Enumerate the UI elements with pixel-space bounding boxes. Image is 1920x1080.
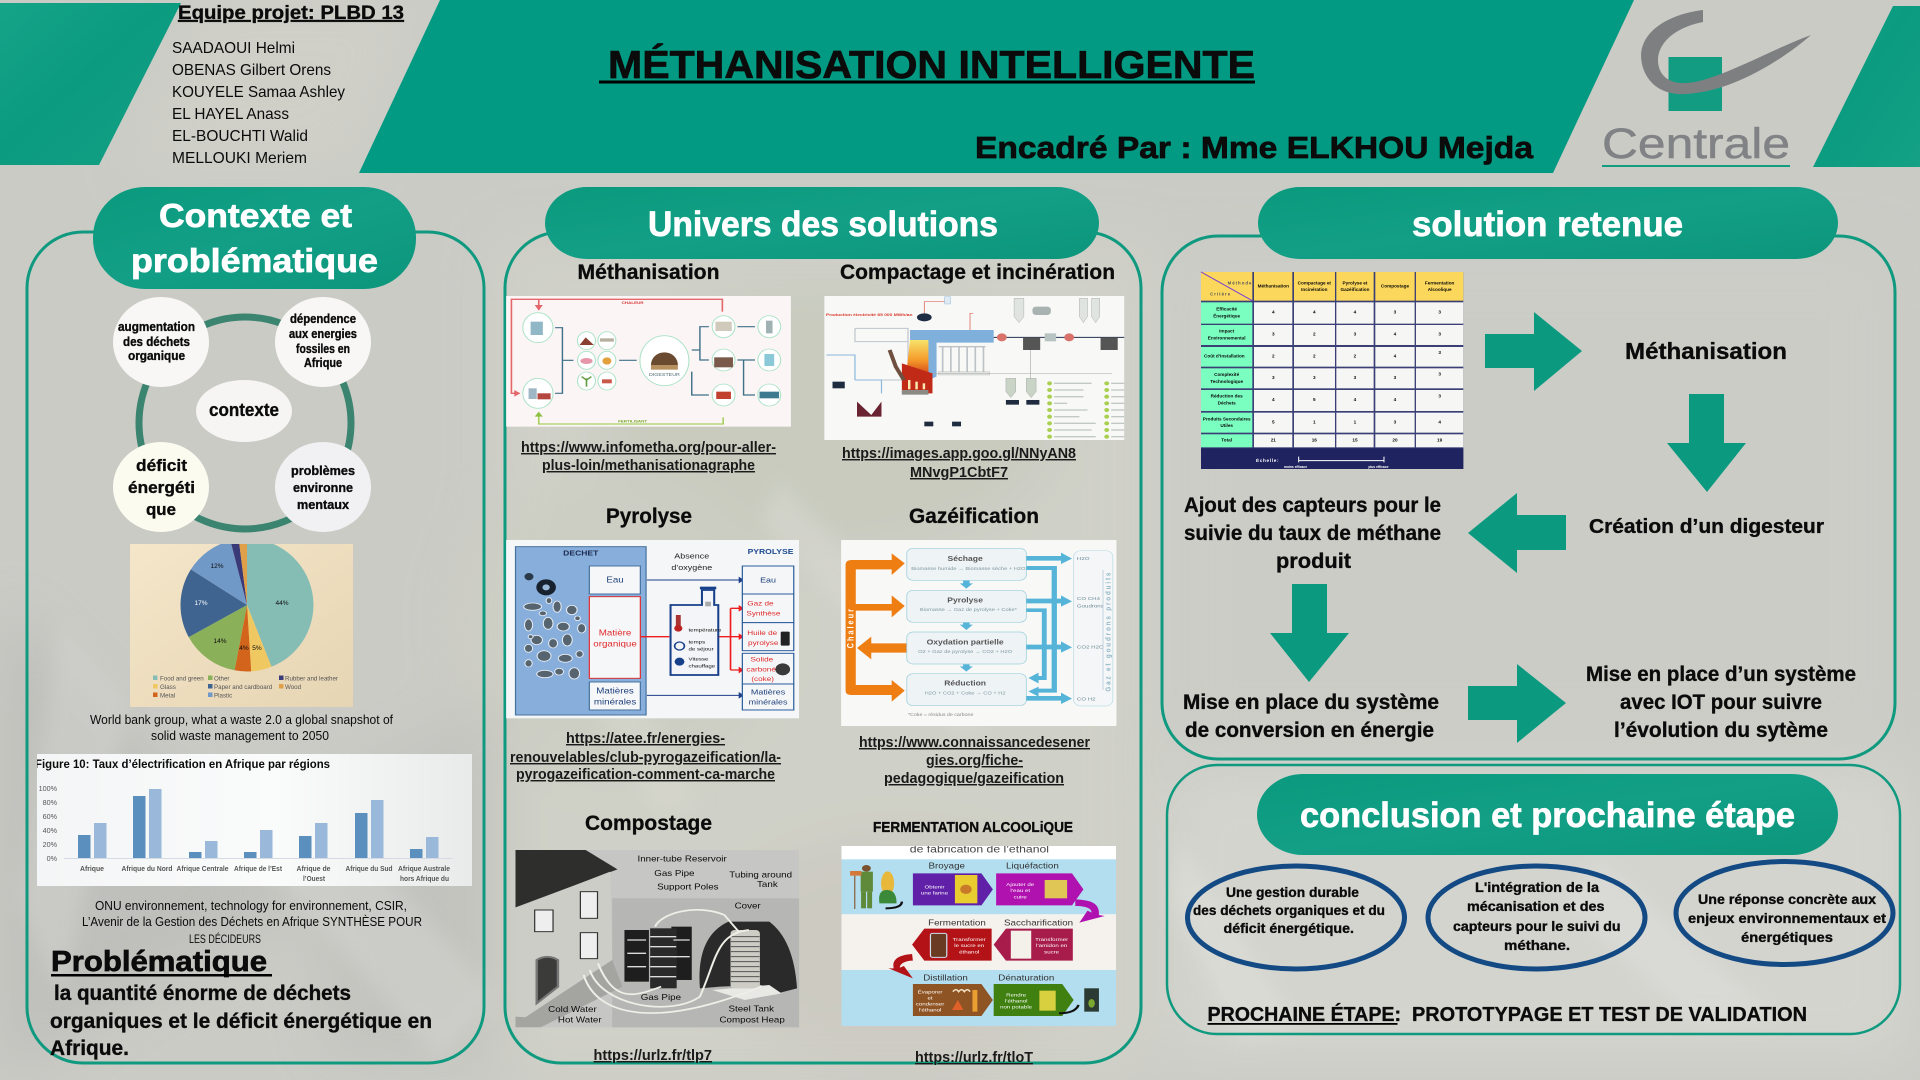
comparison table: Compostage [1381, 284, 1409, 289]
context cycle diagram: problèmes [291, 463, 355, 478]
diagram: methanisation process: DIGESTEUR [649, 372, 680, 378]
context cycle diagram: augmentation [118, 320, 195, 334]
oval: integration: méthane. [1504, 937, 1570, 953]
comparison table: plus efficace [1368, 465, 1389, 469]
bar chart: electrification in Africa: 0% [47, 854, 58, 863]
diagram: compost heap: Cover [735, 901, 761, 910]
comparison table: Coût d’Installation [1204, 354, 1245, 359]
comparison table: 3 [1394, 419, 1397, 424]
comparison table: 3 [1272, 375, 1275, 380]
oval: integration: mécanisation et des [1467, 898, 1605, 914]
comparison table: 3 [1438, 350, 1441, 355]
link: pyrolysis source [510, 731, 781, 783]
text: energy conversion [1183, 691, 1439, 742]
problem statement: organiques et le déficit énergétique en [50, 1010, 432, 1033]
comparison table: 20 [1392, 438, 1398, 443]
bar chart: electrification in Africa: Afrique du Nord [122, 864, 173, 873]
comparison table: 4 [1272, 310, 1275, 315]
pie chart: waste composition: Paper and cardboard [214, 684, 273, 691]
comparison table: Efficacité [1216, 307, 1237, 312]
link: methanisation source [521, 440, 776, 474]
diagram: ethanol production: Saccharification [1004, 918, 1073, 927]
comparison table: Méthanisation [1258, 284, 1289, 289]
text: energy conversion: Mise en place du système [1183, 691, 1439, 714]
caption: ONU source: LES DÉCIDEURS [189, 933, 261, 946]
caption: ONU source: ONU environnement, technology for environnement, CSIR, [95, 899, 407, 913]
diagram: pyrolysis: organique [593, 639, 637, 648]
text: energy conversion: de conversion en énergie [1185, 719, 1434, 742]
comparison table: 4 [1313, 310, 1316, 315]
context cycle diagram: fossiles en [296, 342, 350, 356]
diagram: pyrolysis: d’oxygène [671, 564, 713, 572]
diagram: compost heap: Tank [757, 880, 778, 889]
diagram: gasification: Gaz et goudrons produits [1105, 571, 1113, 692]
diagram: gasification [841, 540, 1116, 726]
text: sensors: suivie du taux de méthane [1184, 522, 1441, 545]
pie chart: waste composition: Metal [160, 692, 175, 700]
context cycle diagram: énergéti [128, 478, 195, 497]
diagram: ethanol production: sucre [1044, 950, 1059, 955]
comparison table: Pyrolyse et [1343, 280, 1368, 285]
team members: EL-BOUCHTI Walid [172, 128, 308, 145]
diagram: incineration plant [824, 296, 1124, 440]
next step [1208, 1003, 1807, 1026]
comparison table: 2 [1313, 332, 1316, 337]
arrow: methanisation to digester [1667, 394, 1746, 492]
comparison table: 3 [1438, 372, 1441, 377]
caption: ONU source [82, 899, 422, 946]
oval: sustainable management: Une gestion durable [1226, 884, 1359, 900]
comparison table: Compactage et [1298, 280, 1331, 285]
diagram: ethanol production: cuire [1014, 895, 1027, 900]
diagram: methanisation process: CHALEUR [622, 300, 644, 305]
comparison table: 1 [1354, 419, 1357, 424]
diagram: gasification: H2O [1077, 556, 1090, 562]
bar chart: electrification in Africa: 40% [43, 826, 58, 835]
diagram: pyrolysis: Solide [751, 655, 773, 663]
comparison table: Environnemental [1208, 336, 1246, 341]
comparison table: 3 [1438, 332, 1441, 337]
heading: conclusion: conclusion et prochaine étape [1300, 796, 1795, 835]
comparison table: Réduction des [1211, 394, 1243, 399]
bar chart: electrification in Africa: hors Afrique du [400, 874, 449, 883]
comparison table: 15 [1352, 438, 1358, 443]
panel: univers des solutions [505, 187, 1141, 1066]
context cycle diagram: déficit [136, 456, 187, 475]
header: main teal banner [359, 0, 1634, 173]
subheading: compactage: Compactage et incinération [840, 261, 1115, 284]
comparison table: Échelle: [1256, 456, 1279, 463]
link: pyrolysis source: renouvelables/club-pyrogazeification/la- [510, 750, 781, 766]
link: gasification source [859, 735, 1090, 787]
heading: contexte: problématique [131, 242, 378, 279]
text: IOT system: Mise en place d’un système [1586, 663, 1856, 686]
arrow: table to methanisation [1485, 312, 1582, 391]
diagram: pyrolysis: PYROLYSE [748, 548, 793, 556]
comparison table: Méthode [1228, 281, 1252, 286]
link: compost source: https://urlz.fr/tlp7 [594, 1048, 712, 1064]
bar chart: electrification in Africa: Afrique [80, 864, 104, 873]
team members [172, 40, 345, 167]
link: methanisation source: plus-loin/methanisationagraphe [542, 458, 755, 474]
diagram: compost heap: Hot Water [558, 1015, 602, 1024]
link: ethanol source: https://urlz.fr/tloT [915, 1050, 1033, 1066]
comparison table: Utiles [1220, 423, 1233, 428]
panel: contexte et problematique [27, 187, 484, 1063]
next step: PROTOTYPAGE ET TEST DE VALIDATION [1412, 1004, 1807, 1026]
bar chart: electrification in Africa: Afrique de l’Est [234, 864, 282, 873]
pie chart: waste composition: Rubber and leather [285, 676, 338, 682]
diagram: pyrolysis: Synthèse [746, 609, 780, 617]
bar chart: electrification in Africa: Afrique Centrale [176, 864, 228, 873]
bar chart: electrification in Africa: Afrique du Sud [346, 864, 393, 873]
diagram: gasification: Biomasse → Gaz de pyrolyse + Coke* [920, 607, 1017, 613]
oval: sustainable management: des déchets organiques et du [1193, 902, 1385, 918]
link: gasification source: https://www.connaissancedesener [859, 735, 1090, 751]
subheading: compostage: Compostage [585, 812, 712, 835]
link: incineration source: https://images.app.goo.gl/NNyAN8 [842, 446, 1076, 462]
subheading: gazeification: Gazéification [909, 505, 1039, 528]
comparison table: 4 [1394, 397, 1397, 402]
problem statement [50, 982, 432, 1060]
diagram: ethanol production: non potable [1000, 1005, 1032, 1010]
problem statement: la quantité énorme de déchets [54, 982, 351, 1005]
link: gasification source: gies.org/fiche- [926, 753, 1023, 769]
oval: sustainable management [1188, 866, 1404, 969]
diagram: pyrolysis: Gaz de [747, 599, 774, 607]
diagram: pyrolysis: de séjour [688, 647, 714, 652]
comparison table: 2 [1272, 353, 1275, 358]
heading: conclusion [1257, 774, 1838, 855]
comparison table: 4 [1354, 310, 1357, 315]
header: left teal shape [0, 3, 181, 165]
context cycle diagram: dépendence [290, 312, 356, 326]
context cycle diagram [113, 297, 371, 532]
diagram: ethanol production: Distillation [923, 973, 968, 982]
pie chart: waste composition: Wood [285, 684, 302, 691]
heading: solution retenue: solution retenue [1412, 205, 1683, 244]
comparison table: Technologique [1210, 379, 1243, 384]
oval: integration: capteurs pour le suivi du [1453, 918, 1620, 934]
diagram: pyrolysis: Matières [751, 688, 785, 696]
pie chart: waste composition: Other [214, 676, 229, 682]
comparison table: 19 [1437, 438, 1443, 443]
bar chart: electrification in Africa: Afrique de [296, 864, 330, 873]
link: pyrolysis source: https://atee.fr/energies- [566, 731, 725, 747]
comparison table: Fermentation [1425, 280, 1455, 285]
diagram: pyrolysis: Matières [596, 686, 634, 695]
pie chart: waste composition: 4% [239, 645, 249, 652]
comparison table: 4 [1394, 353, 1397, 358]
context cycle diagram: aux energies [289, 327, 357, 341]
arrow: sensors to conversion [1270, 584, 1349, 682]
pie chart: waste composition: Glass [160, 684, 176, 691]
comparison table: Produits Secondaires [1203, 416, 1251, 421]
diagram: incineration plant: Production électricité 65 000 MWh/an [826, 312, 913, 317]
heading: univers des solutions: Univers des solutions [648, 205, 998, 244]
text: methanisation: Méthanisation [1625, 338, 1787, 364]
comparison table: 3 [1438, 394, 1441, 399]
diagram: ethanol production: l’éthanol [919, 1008, 941, 1013]
text: IOT system: l’évolution du sytème [1614, 719, 1828, 742]
diagram: gasification: *Coke = résidus de carbone [908, 712, 974, 718]
oval: concrete response: énergétiques [1741, 929, 1833, 945]
diagram: pyrolysis: minérales [594, 697, 637, 706]
text: IOT system: avec IOT pour suivre [1620, 691, 1822, 714]
caption: world bank source [90, 713, 393, 743]
comparison table: 16 [1312, 438, 1317, 443]
link: pyrolysis source: pyrogazeification-comment-ca-marche [516, 767, 775, 783]
diagram: compost heap: Gas Pipe [641, 993, 681, 1002]
diagram: pyrolysis: Huile de [747, 629, 777, 637]
comparison table: Total [1221, 438, 1232, 443]
diagram: pyrolysis: température [688, 628, 721, 633]
heading: solution retenue [1258, 187, 1838, 259]
diagram: pyrolysis: pyrolyse [748, 639, 778, 647]
diagram: ethanol production: et [927, 996, 933, 1001]
heading: univers des solutions [545, 187, 1099, 259]
diagram: compost heap: Cold Water [548, 1005, 597, 1014]
comparison table: 5 [1313, 397, 1316, 402]
context cycle diagram: organique [128, 349, 185, 363]
diagram: ethanol production: Transformer [1035, 937, 1068, 943]
context cycle diagram: mentaux [297, 497, 350, 512]
diagram: gasification: Goudrons [1077, 604, 1104, 609]
oval: integration: L'intégration de la [1475, 879, 1599, 895]
diagram: ethanol production: Fermentation [928, 918, 986, 927]
comparison table [1201, 272, 1463, 469]
bar chart: electrification in Africa: 100% [39, 784, 58, 793]
diagram: ethanol production: une farine [921, 891, 948, 896]
bar chart: electrification in Africa: Afrique Australe [398, 864, 450, 873]
heading: contexte: Contexte et [159, 197, 352, 234]
comparison table: Déchets [1218, 401, 1236, 406]
diagram: ethanol production [841, 845, 1116, 1026]
logo: Centrale [1602, 10, 1811, 168]
team members: OBENAS Gilbert Orens [172, 62, 331, 79]
diagram: gasification: CO H2 [1077, 697, 1096, 702]
diagram: ethanol production: Transformer [953, 937, 986, 943]
comparison table: 3 [1354, 332, 1357, 337]
comparison table: Gazéification [1340, 287, 1370, 292]
diagram: pyrolysis: temps [688, 640, 705, 645]
caption: world bank source: World bank group, what a waste 2.0 a global snapshot of [90, 713, 393, 727]
pie chart: waste composition: Food and green [160, 676, 204, 682]
comparison table: moins efficace [1284, 465, 1307, 469]
pie chart: waste composition: 5% [252, 645, 262, 652]
comparison table: Impact [1219, 329, 1235, 334]
bar chart: electrification in Africa [35, 754, 472, 886]
comparison table: 21 [1271, 438, 1276, 443]
heading: contexte [93, 187, 416, 289]
pie chart: waste composition: 14% [213, 638, 227, 645]
pie chart: waste composition: 17% [194, 600, 208, 607]
diagram: pyrolysis: Eau [606, 576, 624, 584]
diagram: compost heap: Compost Heap [720, 1015, 785, 1024]
diagram: pyrolysis: Eau [760, 576, 777, 584]
diagram: pyrolysis: Absence [674, 552, 710, 560]
pie chart: waste composition [130, 538, 353, 707]
diagram: gasification: Séchage [948, 555, 983, 563]
link: incineration source: MNvgP1CbtF7 [910, 465, 1008, 481]
bar chart: electrification in Africa: Figure 10: Taux d’électrification en Afrique par régions [35, 759, 330, 771]
bar chart: electrification in Africa: 80% [43, 798, 58, 807]
diagram: methanisation process: FERTILISANT [618, 419, 648, 424]
team heading: Equipe projet: PLBD 13 [178, 3, 404, 24]
caption: world bank source: solid waste management to 2050 [151, 729, 329, 743]
team members: MELLOUKI Meriem [172, 150, 307, 167]
diagram: pyrolysis [506, 540, 799, 718]
diagram: ethanol production: Ajouter de [1006, 882, 1034, 888]
supervisor: Encadré Par : Mme ELKHOU Mejda [975, 130, 1534, 165]
problem statement: Afrique. [50, 1037, 129, 1060]
subheading: methanisation: Méthanisation [578, 261, 720, 284]
diagram: gasification: H2O + CO2 + Coke → CO + H2 [925, 691, 1006, 696]
text: sensors [1184, 494, 1441, 573]
arrow: digester to sensors [1468, 493, 1566, 573]
link: incineration source [842, 446, 1076, 481]
pie chart: waste composition: 12% [210, 563, 224, 570]
comparison table: 3 [1394, 375, 1397, 380]
diagram: compost heap [516, 850, 799, 1027]
team members: SAADAOUI Helmi [172, 40, 295, 57]
comparison table: Critère [1210, 292, 1231, 297]
diagram: ethanol production: Évaporer [918, 989, 943, 995]
header: right teal shape [1813, 6, 1920, 167]
oval: concrete response: Une réponse concrète aux [1698, 891, 1876, 907]
diagram: ethanol production: l’eau et [1010, 888, 1031, 894]
comparison table: 4 [1354, 397, 1357, 402]
diagram: compost heap: Gas Pipe [654, 869, 695, 878]
diagram: ethanol production: Obtenir [925, 885, 945, 890]
comparison table: 2 [1313, 353, 1316, 358]
diagram: pyrolysis: chauffage [688, 664, 715, 669]
comparison table: Alcoolique [1428, 287, 1452, 292]
diagram: gasification: O2 + Gaz de pyrolyse → CO2 + H2O [918, 649, 1012, 655]
diagram: compost heap: Steel Tank [728, 1004, 775, 1013]
comparison table: Énergétique [1213, 312, 1241, 319]
link: gasification source: pedagogique/gazeification [884, 771, 1064, 787]
diagram: compost heap: Support Poles [657, 882, 719, 891]
subheading: fermentation: FERMENTATION ALCOOLiQUE [873, 820, 1073, 836]
caption: ONU source: L’Avenir de la Gestion des Déchets en Afrique SYNTHÈSE POUR [82, 914, 422, 929]
text: digester: Création d’un digesteur [1589, 516, 1824, 538]
panel: solution retenue [1162, 187, 1895, 759]
diagram: compost heap: Tubing around [729, 870, 792, 879]
diagram: ethanol production: Liquéfaction [1006, 862, 1059, 870]
diagram: pyrolysis: carboné [746, 665, 776, 673]
comparison table: 4 [1272, 397, 1275, 402]
oval: integration [1428, 866, 1645, 969]
diagram: ethanol production: de fabrication de l’ethanol [910, 845, 1049, 855]
diagram: gasification: Oxydation partielle [927, 638, 1004, 646]
panel: conclusion [1167, 765, 1900, 1034]
arrow: conversion to IOT [1468, 664, 1566, 743]
diagram: ethanol production: l’amidon en [1036, 943, 1067, 949]
diagram: ethanol production: Rendre [1006, 993, 1026, 998]
comparison table: 4 [1438, 419, 1441, 424]
heading: problematique: Problématique [51, 946, 267, 978]
comparison table: 3 [1354, 375, 1357, 380]
context cycle diagram: des déchets [123, 335, 190, 349]
diagram: gasification: CO CH4 [1077, 596, 1100, 602]
diagram: gasification: Chaleur [846, 607, 856, 648]
bar chart: electrification in Africa: l’Ouest [303, 874, 325, 883]
diagram: gasification: Biomasse humide → Biomasse sèche + H2O [911, 566, 1025, 572]
diagram: pyrolysis: (coke) [751, 675, 775, 683]
text: sensors: Ajout des capteurs pour le [1184, 494, 1441, 517]
oval: sustainable management: déficit énergétique. [1224, 920, 1354, 936]
diagram: gasification: Pyrolyse [947, 596, 984, 604]
comparison table: 4 [1394, 332, 1397, 337]
comparison table: 3 [1394, 310, 1397, 315]
diagram: pyrolysis: DECHET [563, 549, 599, 557]
comparison table: 2 [1354, 353, 1357, 358]
comparison table: Incinération [1301, 287, 1328, 292]
diagram: gasification: Réduction [944, 679, 986, 687]
comparison table: 3 [1438, 310, 1441, 315]
diagram: pyrolysis: Vitesse [688, 657, 708, 662]
pie chart: waste composition: Plastic [214, 692, 232, 700]
team members: KOUYELE Samaa Ashley [172, 84, 345, 101]
diagram: ethanol production: Broyage [929, 862, 965, 870]
diagram: ethanol production: le sucre en [954, 943, 984, 949]
comparison table: 1 [1313, 419, 1316, 424]
bar chart: electrification in Africa: 20% [43, 840, 58, 849]
logo: Centrale: Centrale [1602, 120, 1790, 168]
diagram: gasification: CO2 H2O [1077, 645, 1104, 650]
diagram: ethanol production: condenser [916, 1002, 944, 1007]
context cycle diagram: Afrique [304, 356, 342, 370]
text: sensors: produit [1276, 550, 1351, 573]
team members: EL HAYEL Anass [172, 106, 289, 123]
title: MÉTHANISATION INTELLIGENTE [608, 43, 1255, 87]
pie chart: waste composition: 44% [275, 600, 289, 607]
diagram: ethanol production: éthanol [959, 950, 979, 955]
next step: PROCHAINE ÉTAPE: [1208, 1003, 1401, 1026]
oval: concrete response: enjeux environnementaux et [1688, 910, 1886, 926]
context cycle diagram: contexte [209, 400, 279, 420]
comparison table: 5 [1272, 419, 1275, 424]
diagram: ethanol production: Dénaturation [998, 973, 1054, 982]
diagram: pyrolysis: Matière [599, 628, 631, 637]
diagram: compost heap: Inner-tube Reservoir [637, 854, 727, 863]
comparison table: 3 [1272, 332, 1275, 337]
diagram: ethanol production: l’éthanol [1005, 999, 1028, 1004]
comparison table: 3 [1313, 375, 1316, 380]
diagram: methanisation process [506, 296, 791, 427]
link: methanisation source: https://www.infometha.org/pour-aller- [521, 440, 776, 456]
bar chart: electrification in Africa: 60% [43, 812, 58, 821]
text: IOT system [1586, 663, 1856, 742]
context cycle diagram: que [146, 500, 176, 519]
diagram: pyrolysis: minérales [749, 698, 787, 706]
subheading: pyrolyse: Pyrolyse [606, 505, 692, 528]
comparison table: Complexité [1214, 372, 1240, 377]
oval: concrete response [1676, 862, 1893, 964]
context cycle diagram: environne [293, 480, 353, 495]
